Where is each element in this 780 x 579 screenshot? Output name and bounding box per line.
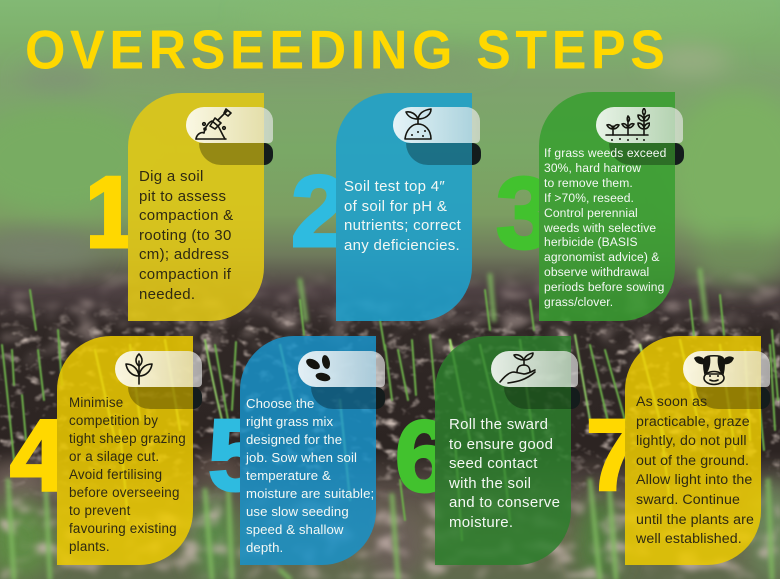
icon: leaf sprig — [125, 353, 153, 385]
pill: step 6 — [491, 351, 578, 387]
text: step 5: Choose the — [246, 396, 314, 411]
text: step 1 — [139, 168, 233, 303]
tab tip: step 4 — [193, 387, 202, 409]
tab shadow: step 6 — [504, 387, 571, 409]
tab shadow: step 3 — [609, 143, 675, 165]
text: step 7: practicable, graze — [636, 414, 750, 430]
panel: step 6 — [435, 336, 571, 565]
title: OVERSEEDING STEPS — [25, 20, 670, 81]
text: step 4: before overseeing — [69, 485, 180, 500]
text: step 7: well established. — [636, 531, 742, 547]
tab tip: step 3 — [675, 143, 684, 165]
tab tip: step 1 — [264, 143, 273, 165]
text: step 6: to ensure good — [449, 436, 553, 453]
text: step 4: or a silage cut. — [69, 449, 159, 464]
text: step 7: Allow light into the — [636, 472, 752, 488]
panel: step 1 — [128, 93, 264, 321]
text: step 7: lightly, do not pull — [636, 433, 747, 449]
pill: step 7 — [683, 351, 770, 387]
icon: cow head — [694, 355, 734, 386]
panel: step 2 — [336, 93, 472, 321]
tab shadow: step 4 — [128, 387, 193, 409]
panel: step 5 — [240, 336, 376, 565]
text: step 4: favouring existing — [69, 521, 177, 536]
text: step 5: use slow seeding — [246, 504, 349, 519]
text: step 4: Avoid fertilising — [69, 467, 162, 482]
text: step 2: any deficiencies. — [344, 237, 460, 254]
text: step 4: Minimise — [69, 395, 123, 410]
text: step 7: As soon as — [636, 394, 707, 410]
icon: sprout in soil — [404, 108, 432, 140]
text: step 6: seed contact — [449, 455, 538, 472]
tab shadow: step 5 — [311, 387, 377, 409]
tab tip: step 5 — [376, 387, 385, 409]
text: step 3: 30%, hard harrow — [544, 161, 641, 175]
pill: step 5 — [298, 351, 385, 387]
icon: seeds — [306, 355, 330, 382]
pill: step 2 — [393, 107, 480, 143]
text: step 2 — [344, 178, 461, 254]
text: step 7 — [636, 394, 754, 547]
text: step 3: Control perennial — [544, 206, 638, 220]
text: step 5: designed for the — [246, 432, 342, 447]
tab tip: step 6 — [571, 387, 580, 409]
text: step 4 — [69, 395, 186, 554]
text: step 6: moisture. — [449, 514, 513, 531]
text: step 4: to prevent — [69, 503, 131, 518]
text: step 5 — [246, 396, 374, 555]
text: step 1: compaction & — [139, 207, 233, 224]
text: step 4: plants. — [69, 539, 110, 554]
text: step 5: job. Sow when soil — [246, 450, 357, 465]
text: step 5: speed & shallow — [246, 522, 344, 537]
text: step 3 — [544, 146, 666, 309]
text: step 7: sward. Continue — [636, 492, 740, 508]
icon: growing plants — [605, 108, 650, 141]
text: step 1: compaction if — [139, 266, 231, 283]
icon: hand holding sprout — [499, 352, 536, 384]
text: step 7: out of the ground. — [636, 453, 749, 469]
text: step 3: observe withdrawal — [544, 265, 649, 279]
text: step 1: cm); address — [139, 246, 229, 263]
text: step 1: rooting (to 30 — [139, 227, 232, 244]
pill: step 4 — [115, 351, 202, 387]
pill: step 1 — [186, 107, 273, 143]
text: step 4: tight sheep grazing — [69, 431, 186, 446]
tab shadow: step 2 — [406, 143, 472, 165]
text: step 6 — [449, 416, 560, 531]
text: step 5: moisture are suitable; — [246, 486, 374, 501]
text: step 3: herbicide (BASIS — [544, 235, 638, 249]
text: step 5: depth. — [246, 540, 283, 555]
text: step 6: with the soil — [449, 475, 531, 492]
text: step 3: If grass weeds exceed — [544, 146, 666, 160]
text: step 3: grass/clover. — [544, 295, 613, 309]
text: step 6: and to conserve — [449, 494, 560, 511]
panel: step 7 — [625, 336, 761, 565]
text: step 3: weeds with selective — [544, 221, 656, 235]
pill: step 3 — [596, 107, 683, 143]
tab shadow: step 1 — [199, 143, 264, 165]
text: step 3: to remove them. — [544, 176, 633, 190]
tab tip: step 2 — [472, 143, 481, 165]
text: step 3: If >70%, reseed. — [544, 191, 634, 205]
text: step 5: temperature & — [246, 468, 331, 483]
text: step 4: competition by — [69, 413, 158, 428]
text: step 2: of soil for pH & — [344, 198, 447, 215]
text: step 1: Dig a soil — [139, 168, 204, 185]
text: step 1: needed. — [139, 286, 195, 303]
text: step 2: nutrients; correct — [344, 217, 461, 234]
text: step 6: Roll the sward — [449, 416, 548, 433]
panel: step 3 — [539, 92, 675, 321]
tab shadow: step 7 — [696, 387, 761, 409]
text: step 7: until the plants are — [636, 512, 754, 528]
panel: step 4 — [57, 336, 193, 565]
text: step 5: right grass mix — [246, 414, 333, 429]
tab tip: step 7 — [761, 387, 770, 409]
text: step 1: pit to assess — [139, 188, 226, 205]
text: step 3: periods before sowing — [544, 280, 664, 294]
text: step 2: Soil test top 4″ — [344, 178, 445, 195]
seedlings seen through the panels — [95, 340, 750, 540]
text: step 3: agronomist advice) & — [544, 250, 660, 264]
icon: shovel in soil — [195, 108, 232, 140]
